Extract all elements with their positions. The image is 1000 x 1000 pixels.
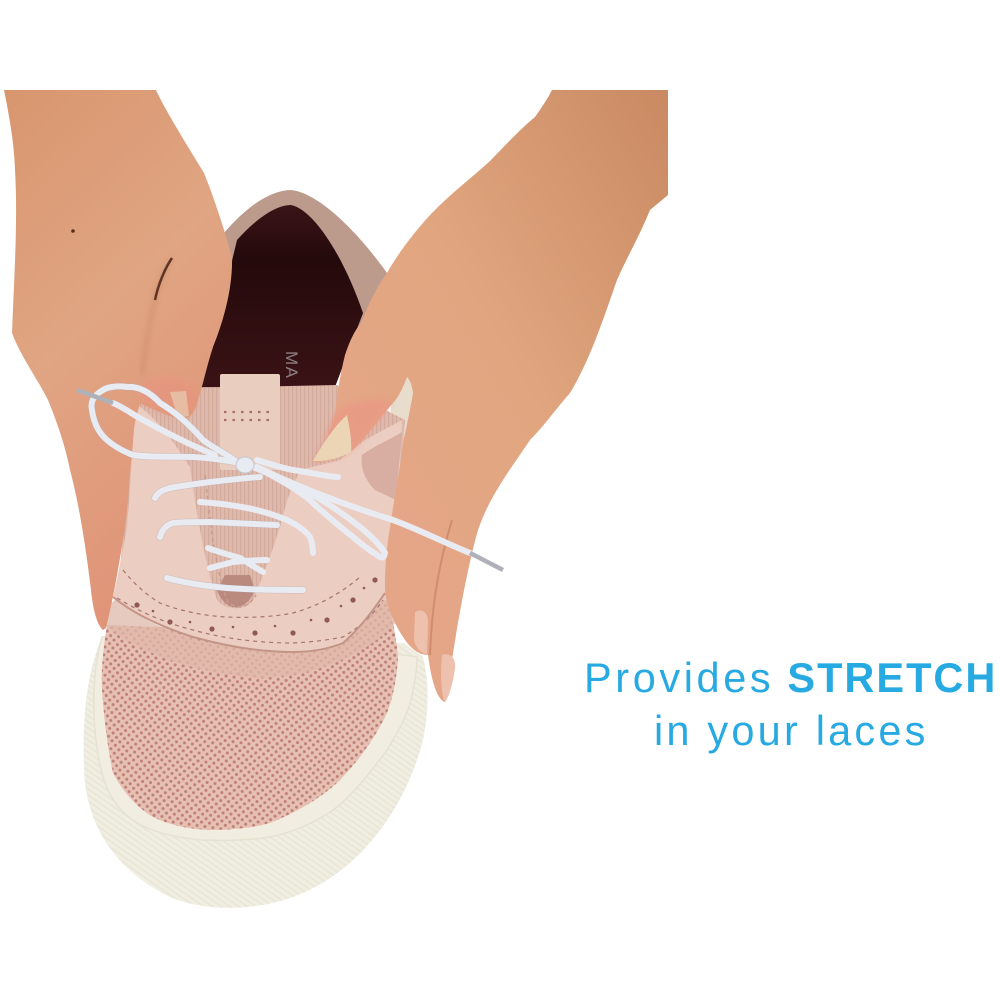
right thumb nail — [313, 415, 351, 461]
brogue perforations — [134, 577, 378, 636]
lace shadow — [91, 386, 303, 590]
leather tongue tab — [220, 374, 280, 470]
shoe upper leather with brogue overlay — [113, 404, 402, 652]
right finger nails — [414, 610, 428, 654]
shoe collar and insole — [198, 190, 387, 395]
insole brand text: MA — [282, 351, 301, 380]
shoe sole — [84, 637, 428, 908]
right hand — [313, 90, 668, 702]
white elastic laces — [77, 386, 503, 590]
lace knot — [236, 457, 254, 473]
left thumb nail — [170, 391, 189, 418]
side of shoe behind right hand — [380, 370, 420, 600]
caption line 1: Provides STRETCH — [584, 654, 997, 701]
caption line 2: in your laces — [654, 707, 929, 754]
brogue stitching — [123, 570, 360, 617]
lace strands — [91, 386, 470, 590]
opening shadow — [217, 575, 255, 607]
lace tips — [77, 390, 503, 570]
right thumb flush — [313, 399, 393, 462]
knit tongue — [118, 385, 405, 625]
shoe knit toe — [102, 596, 398, 830]
left hand — [4, 90, 232, 630]
left thumb tip flush — [140, 376, 198, 419]
mole — [71, 229, 75, 233]
